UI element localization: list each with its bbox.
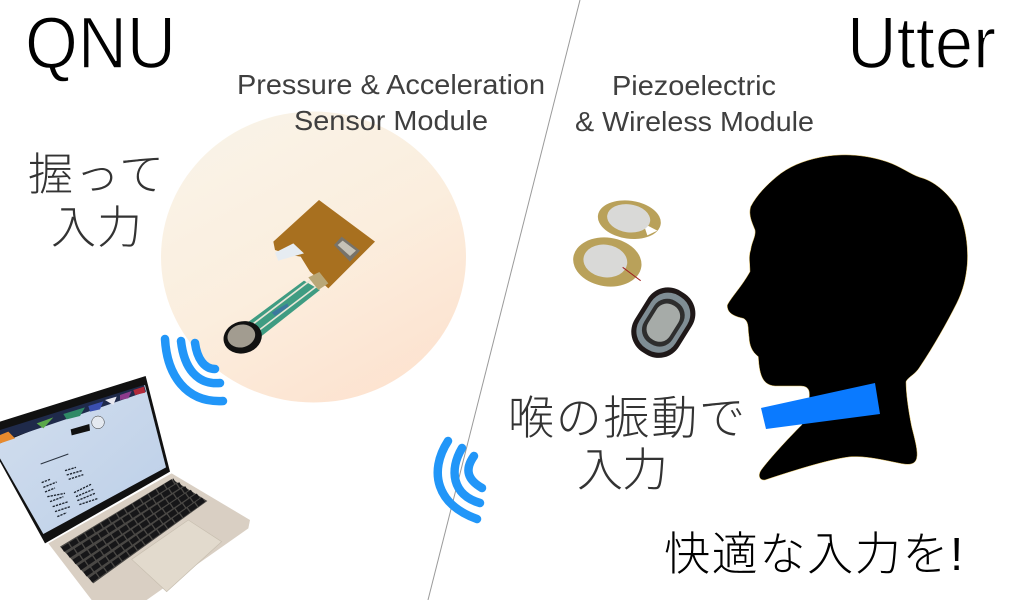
- throat sensor band: [761, 383, 880, 429]
- text: grip input: 握って: [28, 149, 164, 200]
- icon: piezoelectric discs and speaker: [570, 196, 704, 367]
- label: pressure and acceleration sensor module: Sensor Module: [294, 105, 488, 136]
- label: piezoelectric and wireless module: Piezoelectric: [612, 70, 776, 101]
- sensor tail: [247, 281, 320, 336]
- label: piezoelectric and wireless module: & Wireless Module: [575, 106, 814, 137]
- text: comfortable input: 快適な入力を!: [664, 528, 963, 580]
- icon: laptop: [0, 376, 250, 600]
- app text block: [42, 467, 98, 517]
- text: throat vibration input: 喉の振動で: [508, 392, 745, 444]
- laptop base: [48, 473, 250, 600]
- keyboard: [60, 479, 207, 583]
- text: grip input: 入力: [51, 202, 142, 253]
- circuit board: [273, 200, 375, 288]
- ribbon cable: [275, 243, 304, 261]
- trackpad: [132, 520, 222, 592]
- icon: force sensor and circuit board: [220, 200, 375, 358]
- heading text on screen: [41, 454, 68, 464]
- colour band: [0, 385, 146, 443]
- sensor disc: [220, 317, 265, 358]
- text: grip input: [28, 149, 164, 253]
- logo badge: [71, 424, 90, 435]
- icon: wireless signal to computer: [438, 441, 482, 519]
- title: Utter: Utter: [847, 3, 996, 84]
- divider line: [428, 0, 580, 600]
- label: pressure and acceleration sensor module: Pressure & Acceleration: [237, 69, 545, 100]
- label: piezoelectric and wireless module: [575, 70, 814, 137]
- speaker: [622, 278, 704, 367]
- upper piezo disc: [595, 196, 663, 243]
- title: QNU: QNU: [25, 3, 176, 84]
- icon: wireless signal from sensor: [165, 339, 223, 401]
- text: throat vibration input: 入力: [577, 444, 668, 496]
- text: throat vibration input: [508, 392, 745, 496]
- lower piezo disc: [570, 233, 645, 291]
- connector: [334, 237, 360, 262]
- screen bezel: [0, 376, 170, 543]
- screen: [0, 385, 166, 534]
- label: pressure and acceleration sensor module: [237, 69, 545, 136]
- sensor module circle backdrop: [161, 112, 466, 402]
- icon: head silhouette: [727, 155, 968, 480]
